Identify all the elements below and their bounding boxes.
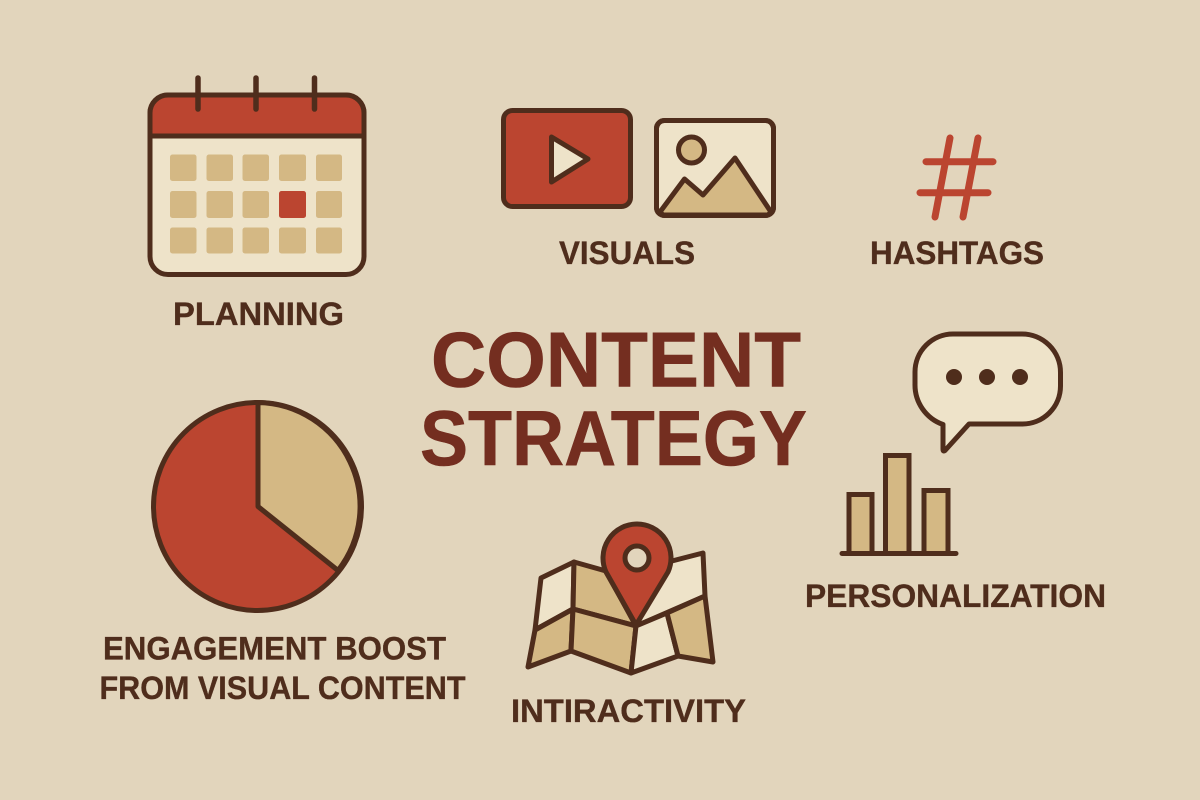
label: engagement boost: ENGAGEMENT BOOST	[103, 630, 446, 666]
label: planning: PLANNING	[173, 296, 344, 332]
pie chart	[154, 402, 362, 610]
icon: speech bubble	[915, 334, 1060, 451]
label: engagement boost	[100, 630, 466, 706]
label: hashtags: HASHTAGS	[870, 235, 1044, 271]
icon: folded map	[528, 553, 713, 673]
panel: engagement pie chart	[100, 402, 466, 706]
label: visuals: VISUALS	[559, 235, 695, 271]
title: CONTENT	[431, 318, 801, 404]
bar chart	[842, 456, 956, 554]
panel: hashtags	[870, 138, 1044, 271]
icon: location pin	[603, 524, 671, 625]
icon: video player	[504, 110, 630, 206]
panel: planning	[150, 78, 364, 332]
label: engagement boost: FROM VISUAL CONTENT	[100, 670, 466, 706]
panel: visuals	[504, 110, 774, 271]
label: personalization: PERSONALIZATION	[805, 578, 1106, 614]
title	[420, 318, 807, 482]
label: intiractivity: INTIRACTIVITY	[511, 693, 746, 729]
icon: image	[656, 120, 774, 216]
panel: interactivity	[511, 524, 746, 729]
title: STRATEGY	[420, 396, 807, 482]
icon: calendar	[150, 78, 364, 274]
icon: hash symbol	[920, 138, 993, 217]
panel: personalization	[805, 334, 1106, 614]
